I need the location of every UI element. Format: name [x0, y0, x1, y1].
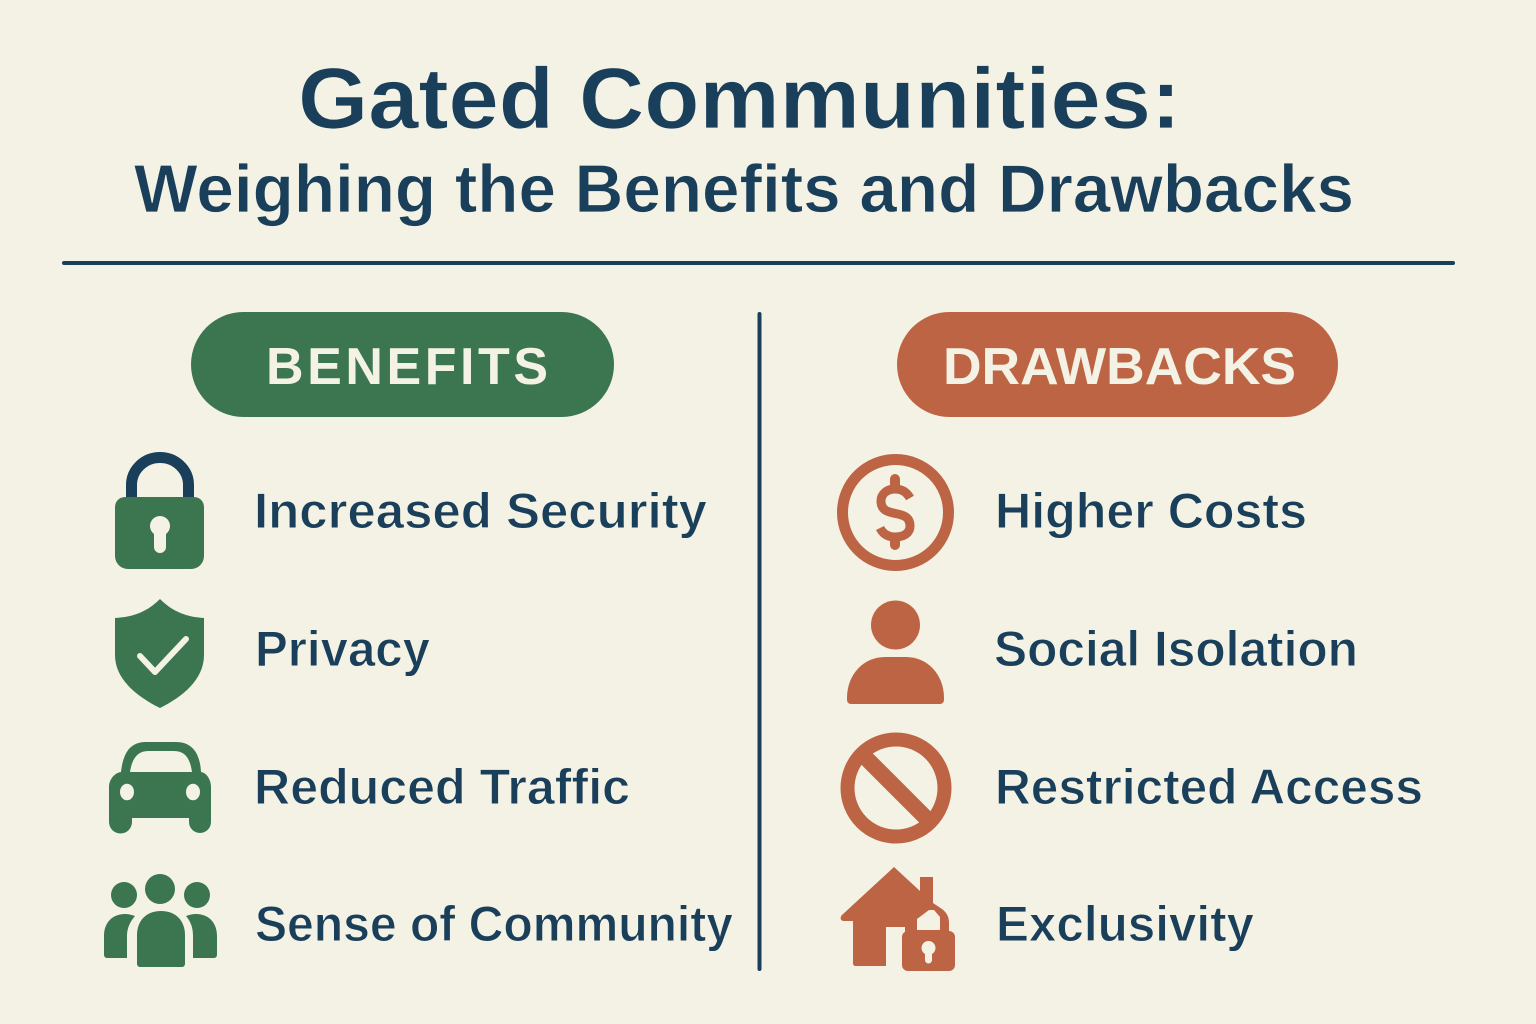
- icon: shield with check: [115, 599, 204, 708]
- label: increased security: Increased Security: [254, 483, 707, 539]
- label: exclusivity: Exclusivity: [996, 896, 1254, 952]
- title: Gated Communities:: [298, 51, 1181, 147]
- icon: single person: [847, 600, 944, 704]
- subtitle: Weighing the Benefits and Drawbacks: [134, 151, 1354, 227]
- panel: benefits: [104, 312, 733, 967]
- icon: group of people: [104, 874, 217, 967]
- label: sense of community: Sense of Community: [255, 896, 733, 952]
- label: reduced traffic: Reduced Traffic: [254, 759, 630, 815]
- heading: benefits pill: BENEFITS: [266, 338, 548, 396]
- label: restricted access: Restricted Access: [995, 759, 1423, 815]
- icon: prohibited sign: [848, 740, 944, 836]
- heading: benefits pill: [191, 312, 614, 417]
- heading: drawbacks pill: [897, 312, 1338, 417]
- label: higher costs: Higher Costs: [995, 483, 1307, 539]
- icon: dollar coin: [842, 460, 948, 566]
- icon: padlock: [115, 458, 204, 569]
- label: social isolation: Social Isolation: [994, 621, 1358, 677]
- label: privacy: Privacy: [255, 621, 430, 677]
- heading: drawbacks pill: DRAWBACKS: [943, 338, 1296, 396]
- panel: drawbacks: [841, 312, 1423, 971]
- icon: house with padlock: [841, 867, 955, 971]
- icon: car: [109, 742, 211, 834]
